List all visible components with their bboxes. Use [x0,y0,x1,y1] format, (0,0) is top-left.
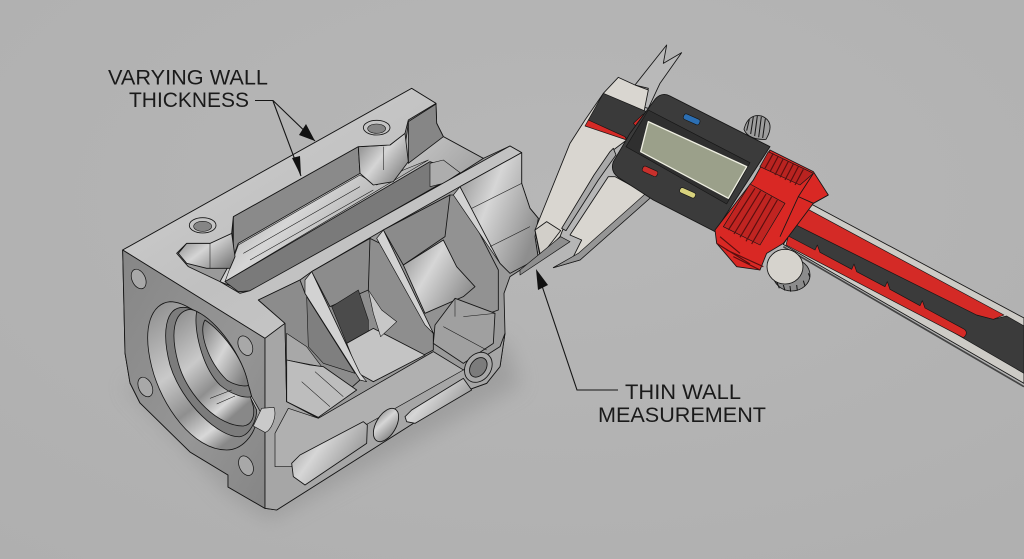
block silhouette [123,88,538,510]
middle step [166,307,257,437]
top face with bolt holes [123,88,522,338]
red slider body [715,150,828,270]
boss hole [459,347,498,388]
soft shadow under the block [125,340,520,520]
lock screw knob [744,116,770,139]
inner step [174,309,254,426]
pocket 1 [258,280,360,417]
digital caliper [520,45,1024,387]
label: THIN WALL [625,381,741,404]
thumb wheel [767,249,810,292]
bolt hole: front [189,218,216,233]
bolt hole: rear [363,120,390,135]
keyway notch [253,407,275,432]
display head [612,94,770,232]
leader arrow [538,274,618,390]
caliper beam [783,203,1024,387]
stepped bore in the front face [148,302,275,450]
thin flange wall [460,153,538,273]
outer counterbore [148,302,263,450]
label: VARYING WALL [108,66,268,90]
pocket 2 [312,238,433,382]
leader arrows [255,100,315,176]
screen bezel [626,110,750,204]
callout: thin wall measurement: MEASUREMENT [598,404,766,427]
pocket 3 [383,195,498,363]
upper inside jaws [635,45,682,108]
bore opening [203,320,248,386]
LCD screen [641,122,747,198]
rear trough [178,104,483,293]
callout: varying wall thickness [108,66,315,176]
step wall [196,312,252,397]
front face [123,250,265,508]
housing: machined aluminium block [123,88,538,510]
yellow button [679,187,696,199]
blue button [683,113,701,126]
bottom face slots [275,352,472,485]
callout: varying wall thickness: THICKNESS [129,89,249,112]
fixed jaw [520,77,648,275]
callout: thin wall measurement [536,269,766,427]
rib edges [305,187,507,382]
lower floor region [265,323,505,510]
red button [641,165,659,177]
moving jaw [553,148,652,268]
mounting holes [128,267,289,497]
